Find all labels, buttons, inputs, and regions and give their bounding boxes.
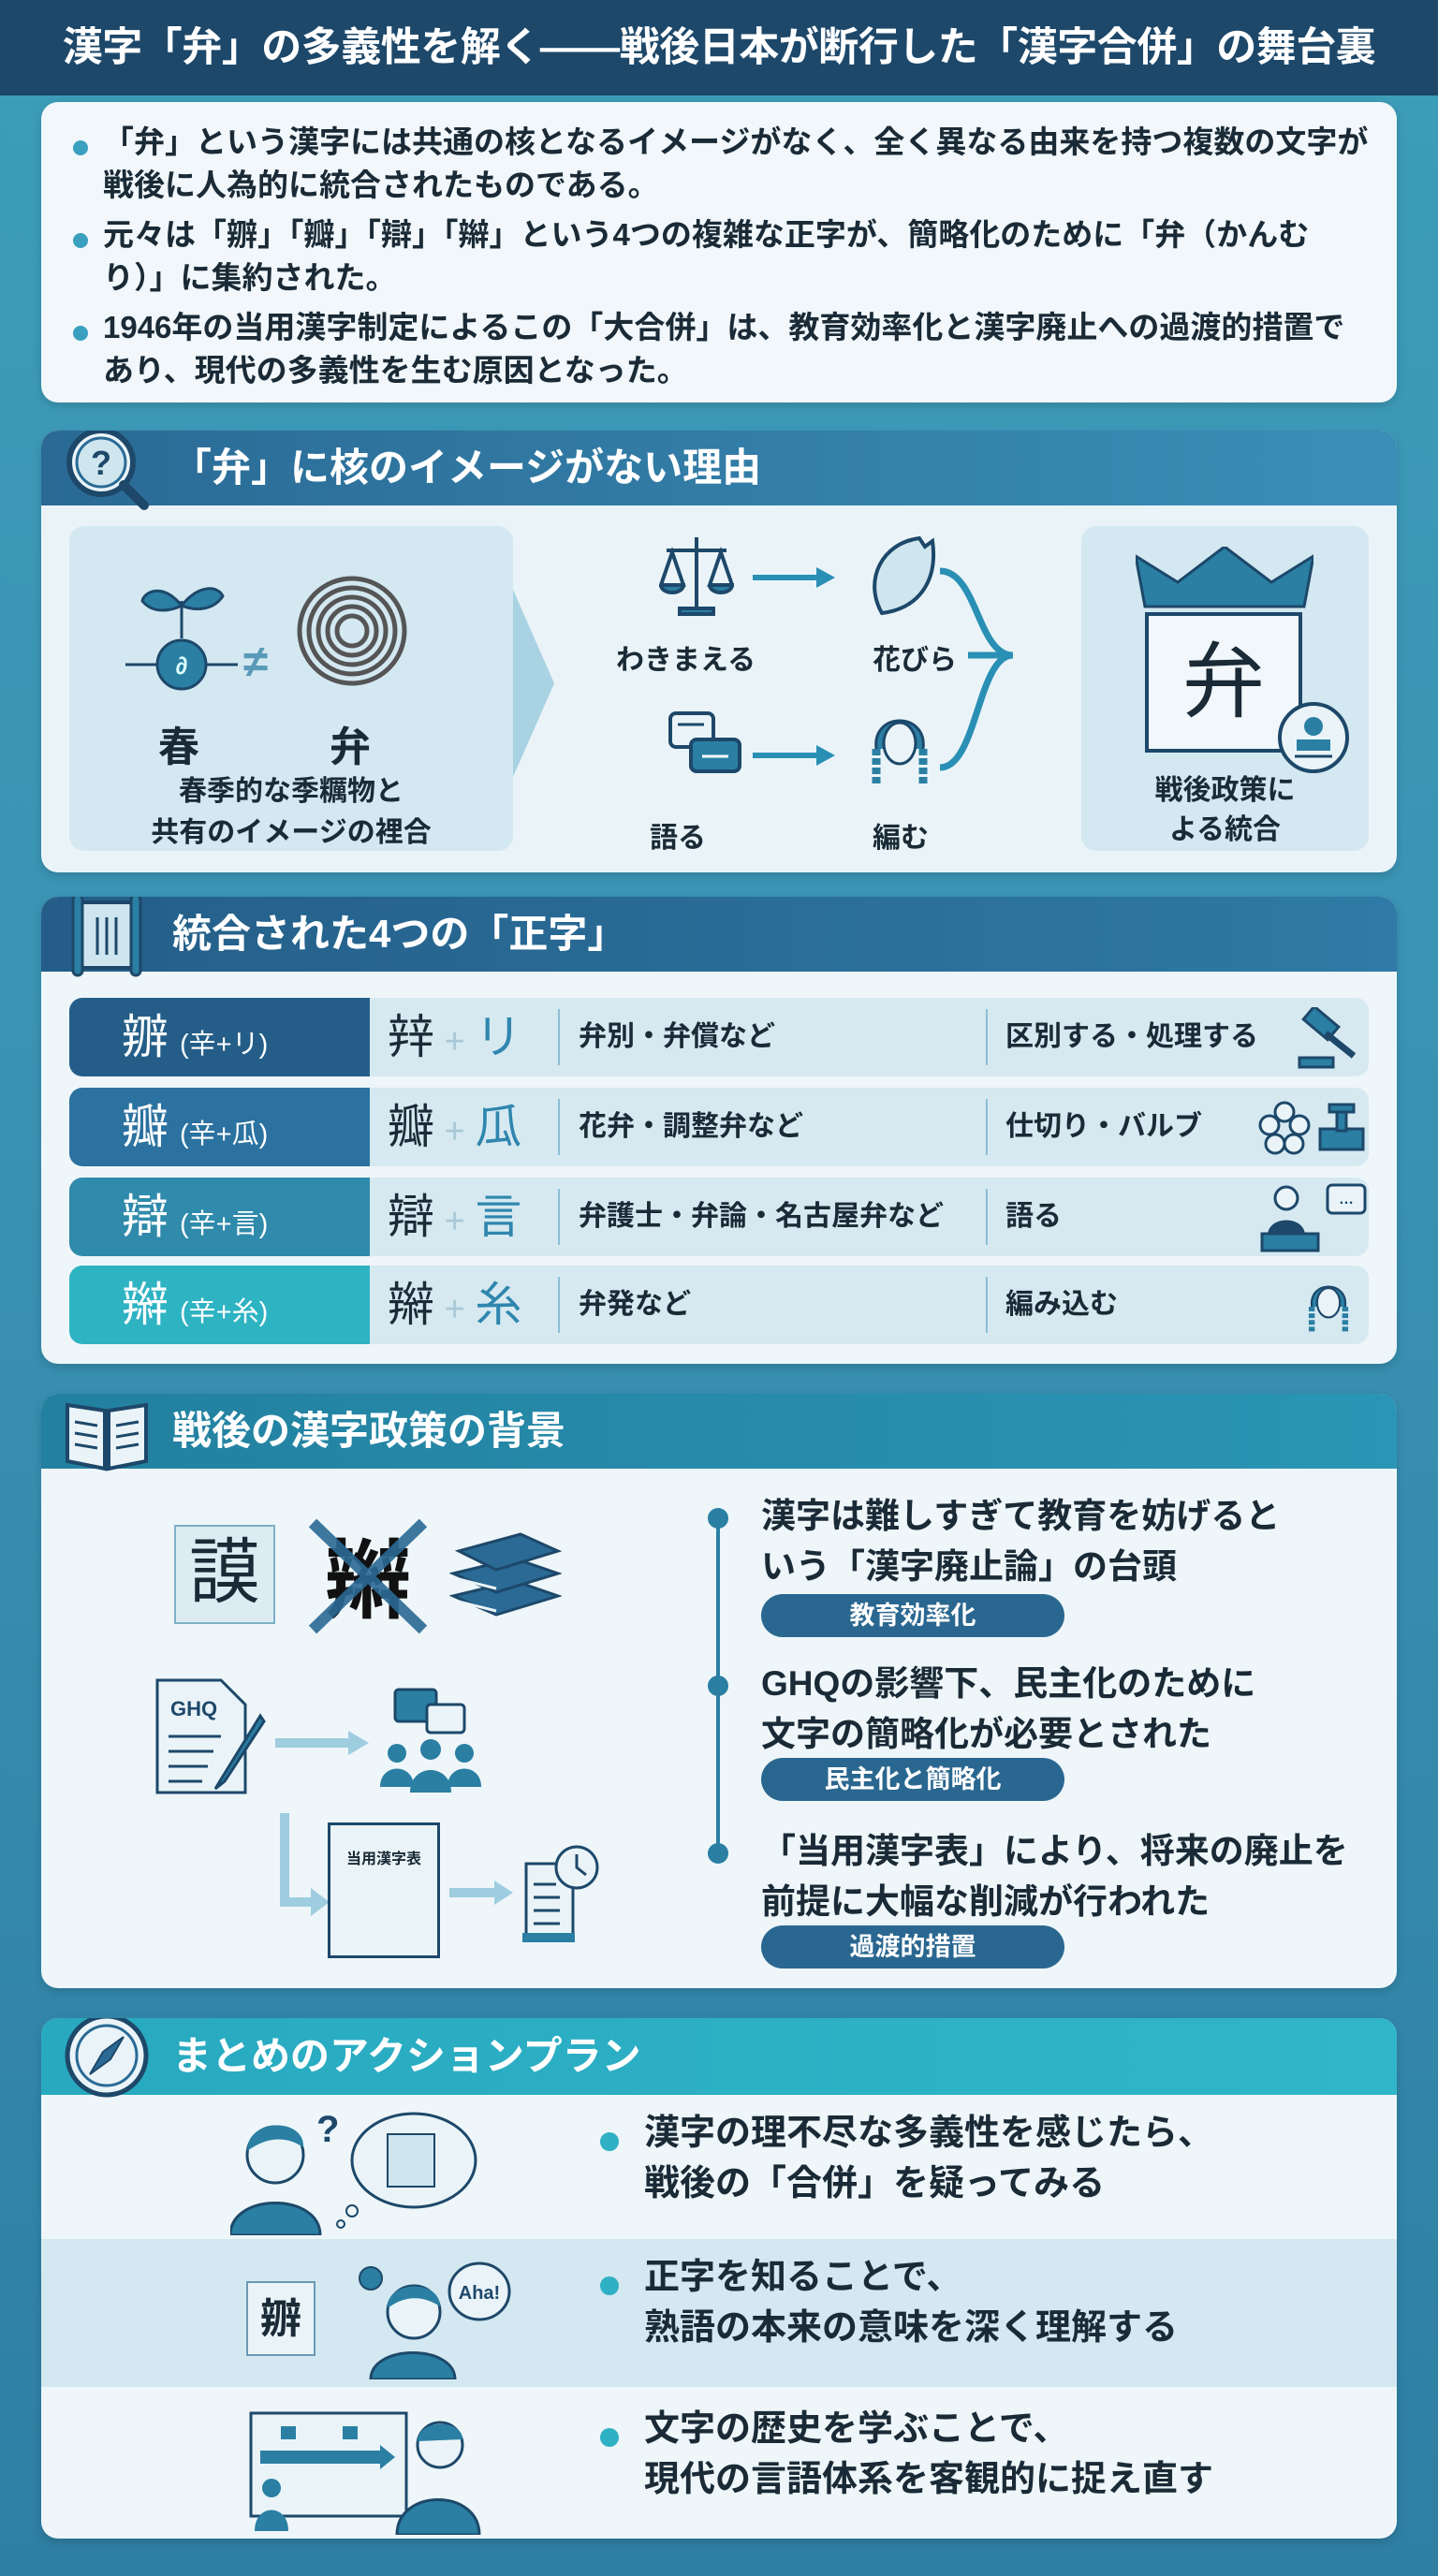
icon: flower and valve [1258,1101,1365,1155]
icon group: meanings: 編む [873,823,929,854]
icon: sprout: ∂ [176,651,188,680]
timeline [708,1497,1348,1969]
heading [41,1394,1397,1469]
sub-panel: spring vs ben: 共有のイメージの裡合 [151,817,432,848]
row: 辮: 弁発など [579,1289,691,1320]
icon: speaker: … [1339,1192,1354,1208]
icon: kanji box [174,1525,275,1624]
timeline item 2: 民主化と簡略化 [824,1765,1002,1793]
timeline item 3: 前提に大幅な削減が行われた [761,1882,1210,1921]
timeline item 1: いう「漢字廃止論」の台頭 [761,1547,1177,1586]
panel: action plan [41,2018,1397,2539]
row: 辮: 辮 (辛+糸) [122,1279,268,1331]
icon: toyo kanji document: 当用漢字表 [346,1852,421,1867]
row: 辧: 弁別・弁償など [579,1021,775,1052]
icon: scales [659,537,734,616]
icon: people discussion [380,1689,481,1793]
action row 2: 正字を知ることで、 [644,2258,961,2297]
bullet 3: 1946年の当用漢字制定によるこの「大合併」は、教育効率化と漢字廃止への過渡的措置で [103,310,1344,344]
row: 辯 [69,1178,1369,1256]
icon: braided girl [1309,1286,1348,1331]
heading [41,897,1397,972]
icon: magnifier: ? [91,444,111,482]
icon group: meanings: わきまえる [616,645,756,676]
arrows: converging [940,567,1013,771]
row: 辧: 辡 + リ [388,1011,521,1063]
action row 3 [41,2391,1397,2539]
timeline item 3: 「当用漢字表」により、将来の廃止を [761,1832,1348,1870]
sub-panel: spring vs ben [69,526,513,851]
labels: 春 [158,724,199,770]
heading: 「弁」に核のイメージがない理由 [172,446,761,490]
row: 辯: 辯 + 言 [388,1191,521,1243]
bullet 3: あり、現代の多義性を生む原因となった。 [103,353,688,388]
action row 2: 熟語の本来の意味を深く理解する [644,2308,1178,2348]
bullet 1: 戦後に人為的に統合されたものである。 [103,168,659,202]
arrow: chevron [513,590,554,777]
row: 瓣: 瓣 + 瓜 [388,1101,521,1153]
arrow [275,1731,369,1755]
icon: scroll [71,897,142,977]
panel: four seiji [41,897,1397,1364]
icon: coil [298,577,406,685]
icon: magnifier [66,431,149,510]
timeline item 1 [708,1497,1280,1637]
illustration group: policy [155,1517,599,1958]
row: 辮: 編み込む [1005,1289,1118,1320]
action row 1: 戦後の「合併」を疑ってみる [644,2164,1105,2203]
arrow: L-shaped [280,1813,328,1916]
icon: compass [66,2018,148,2097]
icon: crown [1136,547,1313,608]
sub-panel: spring vs ben: 春季的な季糲物と [179,776,404,807]
row: 辮: 辮 + 糸 [388,1279,521,1331]
icon: GHQ document [155,1679,266,1793]
arrow [753,567,835,588]
box: 弁 [1145,612,1302,753]
icon group: meanings [616,535,1013,854]
icon: aha person [246,2261,511,2379]
row: 辧 [69,998,1369,1076]
sub-panel: merged [1081,526,1369,851]
icon: sprout [125,587,238,691]
panel: postwar policy [41,1394,1397,1988]
icon: toyo kanji document [328,1822,440,1958]
icon: gavel [1298,1007,1356,1069]
panel: reasons [41,431,1397,872]
row: 辯: 語る [1005,1201,1062,1232]
bullet 1: 「弁」という漢字には共通の核となるイメージがなく、全く異なる由来を持つ複数の文字が [103,124,1368,159]
icon: petal [873,535,936,616]
timeline item 2: GHQの影響下、民主化のために [761,1664,1255,1703]
bullet 3 [73,310,1344,388]
row: 瓣 [69,1088,1369,1166]
row: 瓣: 花弁・調整弁など [579,1111,803,1142]
icon: kanji box: 謨 [189,1533,260,1613]
row: 辯: 弁護士・弁論・名古屋弁など [579,1201,944,1232]
icon: thinking person [230,2109,477,2235]
title bar: 漢字「弁」の多義性を解く――戦後日本が断行した「漢字合併」の舞台裏 [63,25,1375,70]
icon: stamp [1278,702,1349,773]
panel: summary [41,102,1397,402]
sub-panel: merged: よる統合 [1169,814,1281,845]
bullet 2: 元々は「辧」「瓣」「辯」「辮」という4つの複雑な正字が、簡略化のために「弁（かんむ [103,217,1309,252]
timeline item 2: 文字の簡略化が必要とされた [761,1715,1211,1753]
title bar [0,0,1438,95]
icon: speaker [1260,1183,1367,1252]
icon: chat [668,711,741,773]
icon group: meanings: 語る [650,823,706,854]
arrow [449,1881,513,1905]
row: 辮 [69,1266,1369,1344]
icon group: meanings: 花びら [873,645,957,676]
sub-panel: merged: 戦後政策に [1155,775,1296,806]
timeline item 1: 教育効率化 [850,1602,976,1630]
action row 2 [41,2239,1397,2387]
action row 1: 漢字の理不尽な多義性を感じたら、 [644,2114,1213,2153]
heading [41,431,1397,505]
icon: open book [66,1402,148,1471]
icon: aha person: Aha! [459,2283,500,2304]
row: 瓣: 瓣 (辛+瓜) [122,1101,268,1153]
bullet 2: り）」に集約された。 [103,260,397,295]
symbol: not equal: ≠ [243,637,268,687]
bullet 1 [73,124,1368,202]
timeline item 3 [708,1832,1348,1969]
row: 瓣: 仕切り・バルブ [1005,1111,1202,1142]
heading: まとめのアクションプラン [172,2034,641,2078]
timeline item 3: 過渡的措置 [850,1933,976,1961]
heading [41,2018,1397,2095]
icon: clock document [522,1846,599,1942]
timeline item 1: 漢字は難しすぎて教育を妨げると [761,1497,1280,1535]
icon: GHQ document: GHQ [170,1697,217,1720]
arrow [753,745,835,766]
bullet 2 [73,217,1309,295]
action row 1 [230,2109,1213,2235]
action row 3: 現代の言語体系を客観的に捉え直す [644,2460,1213,2499]
icon: thinking person: ? [316,2109,339,2150]
icon: timeline presentation [249,2409,483,2535]
row: 辯: 辯 (辛+言) [122,1191,268,1243]
box: 弁: 弁 [1182,636,1265,728]
timeline item 2 [708,1664,1255,1801]
row: 辧: 辧 (辛+リ) [122,1011,268,1063]
sub-panel: spring vs ben: 弁 [330,724,371,770]
heading: 戦後の漢字政策の背景 [172,1409,565,1453]
icon: braided girl [873,719,927,783]
heading: 統合された4つの「正字」 [172,912,626,956]
icon: aha person: 辧 [260,2285,301,2345]
action row 3: 文字の歴史を学ぶことで、 [644,2409,1068,2449]
icon: books [449,1532,562,1617]
row: 辧: 区別する・処理する [1005,1021,1258,1052]
